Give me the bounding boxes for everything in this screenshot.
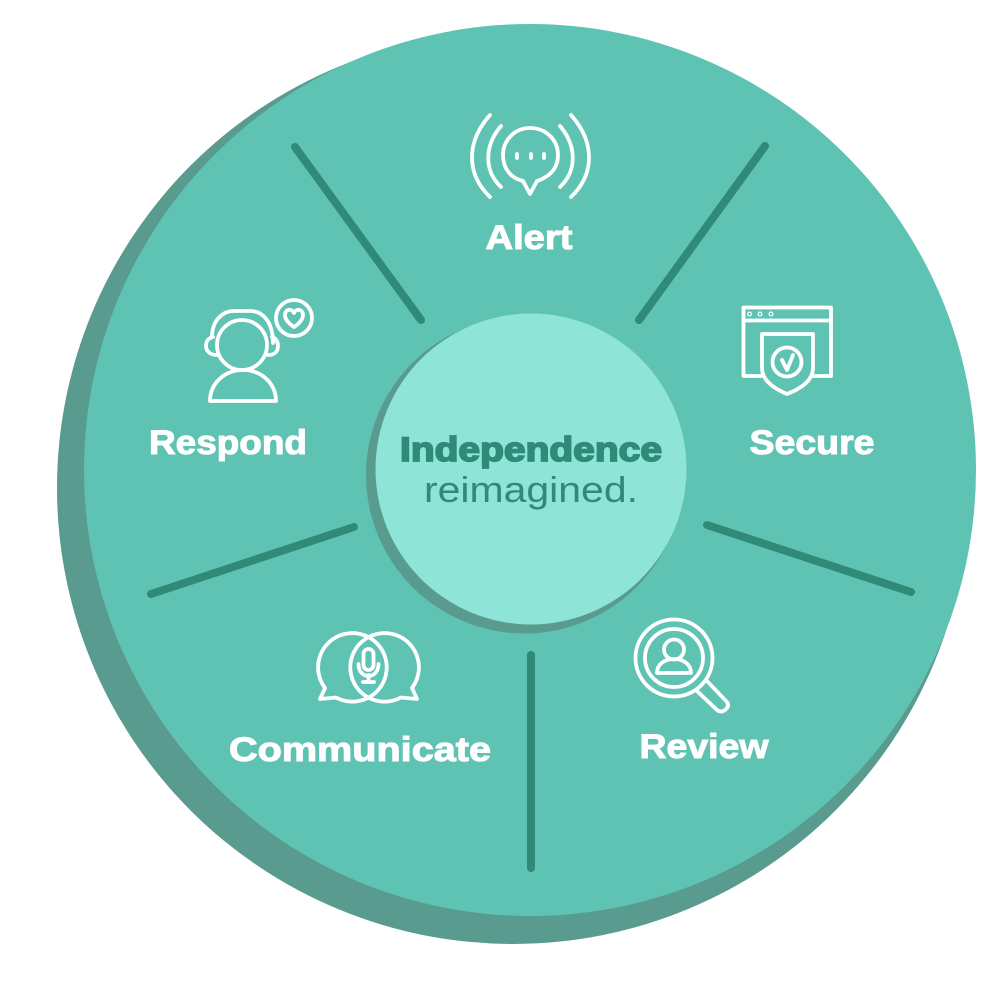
icon: magnifying glass with person: [636, 620, 728, 712]
label: Respond: Respond: [149, 424, 307, 462]
spoke dividers: [151, 146, 911, 868]
segment: Secure: [744, 308, 874, 462]
label: Alert: Alert: [486, 219, 572, 257]
wheel disc: [84, 24, 976, 916]
icon: person with headset and heart badge: [206, 300, 312, 401]
segment: Respond: [149, 300, 312, 462]
label: Secure: Secure: [750, 424, 874, 462]
label: Communicate: Communicate: [229, 731, 491, 769]
label: Review: Review: [640, 728, 769, 766]
center circle: [376, 314, 686, 624]
center title: Independence: [400, 431, 662, 469]
center title: reimagined.: [424, 469, 638, 510]
center circle shadow: [366, 316, 683, 634]
segment: Communicate: [229, 633, 491, 769]
icon: browser window with shield: [744, 308, 831, 394]
icon: alert speech bubble with signal waves: [472, 115, 589, 197]
segment: Review: [636, 620, 769, 766]
segment: Alert: [472, 115, 589, 257]
icon: overlapping speech bubbles with microphone: [318, 633, 419, 702]
center title: [400, 431, 662, 510]
